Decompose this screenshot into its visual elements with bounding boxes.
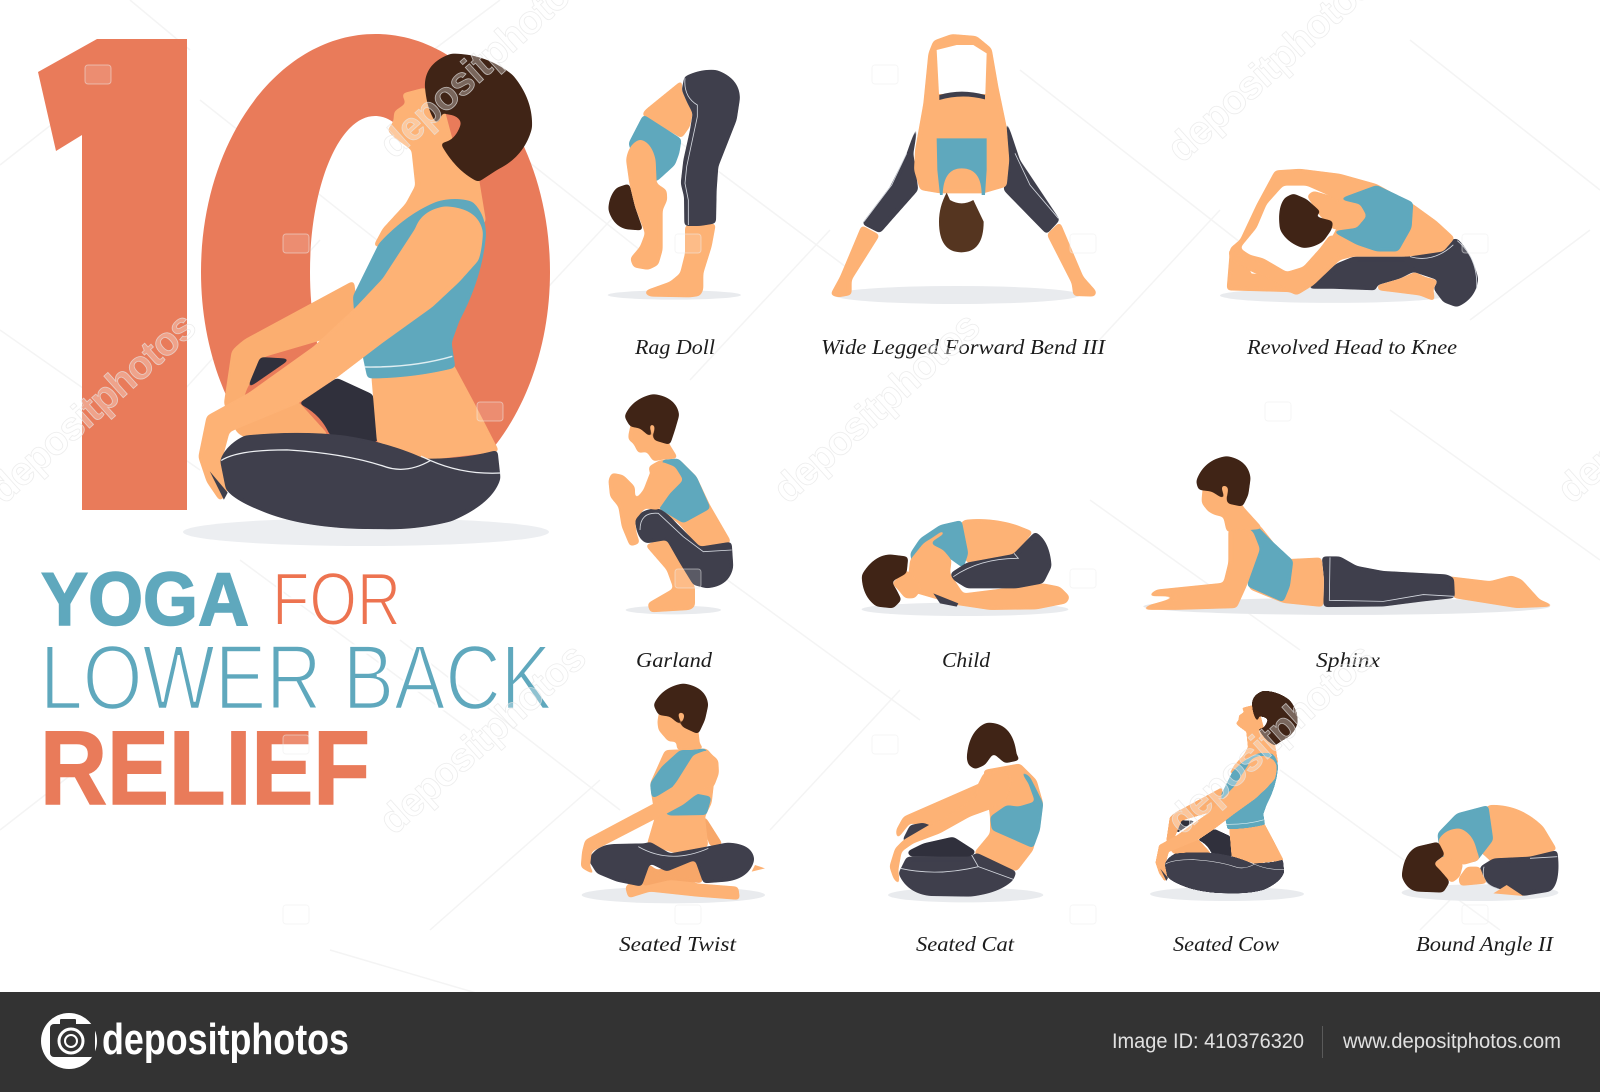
pose captions (619, 335, 1554, 956)
footer bar (0, 992, 1600, 1092)
watermark camera icons (85, 65, 1488, 924)
pose captions: Child (942, 648, 991, 672)
pose captions: Seated Cat (916, 932, 1015, 956)
title: FOR (272, 557, 401, 641)
pose: seated cow (1155, 691, 1298, 893)
pose: bound angle (1402, 805, 1559, 901)
pose captions: Wide Legged Forward Bend III (821, 335, 1106, 359)
pose: wide legged forward bend (830, 34, 1097, 304)
shadow: main figure (183, 518, 549, 546)
pose captions: Rag Doll (634, 335, 715, 359)
title: LOWER BACK (40, 627, 552, 729)
pose: seated cat (888, 723, 1043, 902)
main figure: seated cow pose (198, 54, 532, 529)
pose captions: Bound Angle II (1416, 932, 1554, 956)
big number 10 (38, 34, 550, 510)
pose captions: Seated Twist (619, 932, 737, 956)
pose: garland (608, 394, 733, 614)
watermark text (0, 0, 1600, 843)
pose captions: Garland (636, 648, 713, 672)
pose: child (862, 519, 1070, 616)
watermark text: depositphotos (371, 635, 595, 843)
pose captions: Revolved Head to Knee (1246, 335, 1457, 359)
title: RELIEF (40, 710, 370, 827)
title (40, 557, 552, 827)
watermark text: depositphotos (1159, 635, 1383, 843)
pose: rag doll (608, 70, 741, 300)
icon: camera logo (41, 1013, 97, 1069)
pose captions: Seated Cow (1173, 932, 1279, 956)
title: YOGA (41, 557, 249, 641)
pose: sphinx (1140, 456, 1557, 615)
image id: Image ID: 410376320 (1112, 1030, 1304, 1053)
shadow: seated cow (1150, 887, 1304, 901)
pose: revolved head to knee (1220, 169, 1478, 307)
website url: www.depositphotos.com (1342, 1030, 1561, 1053)
logo wordmark: depositphotos (102, 1015, 349, 1064)
pose: seated twist (581, 683, 765, 903)
pose captions: Sphinx (1316, 648, 1381, 672)
watermark text: depositphotos (765, 304, 989, 512)
